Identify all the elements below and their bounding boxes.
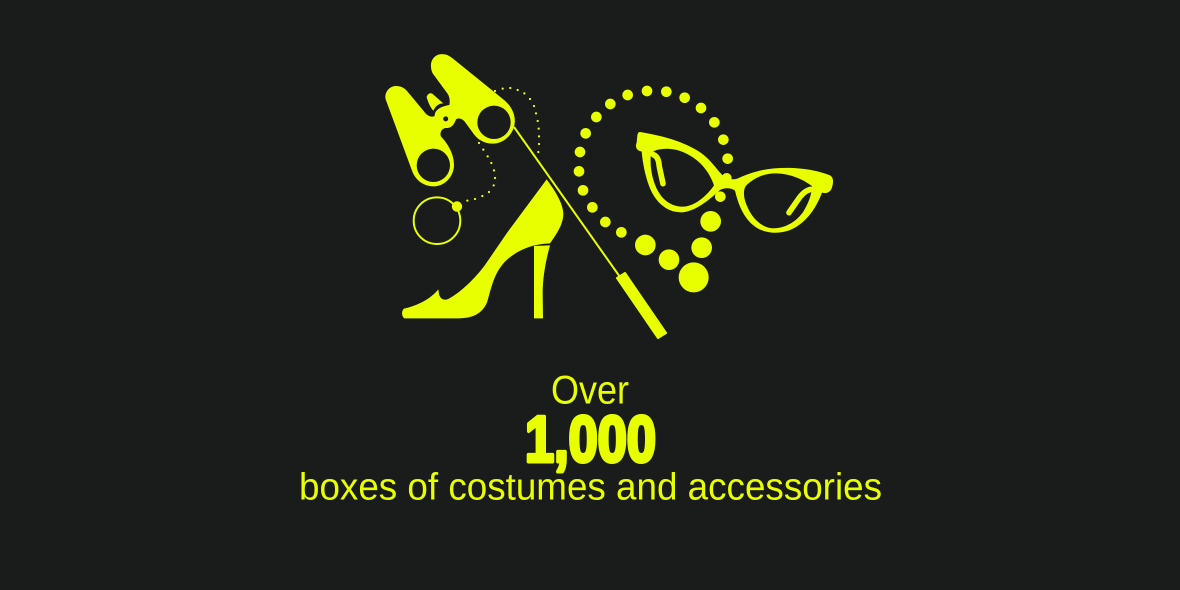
icon: lorgnette opera glasses <box>385 54 515 186</box>
glasses right temple arm <box>789 189 811 213</box>
icon: cat-eye glasses <box>636 132 833 233</box>
icon: lorgnette hinge nub <box>427 93 443 111</box>
icon: dotted lorgnette chain <box>466 87 540 202</box>
text: Over: Over <box>551 368 629 412</box>
icon: lorgnette handle <box>617 273 666 338</box>
shoe heel <box>534 245 550 318</box>
icon: high heel shoe <box>402 179 563 318</box>
glasses left temple arm <box>653 155 663 184</box>
icon: single ring and bead <box>414 197 462 244</box>
icon: lorgnette stick line <box>514 127 620 277</box>
icon: pearl necklace <box>574 86 733 292</box>
text: boxes of costumes and accessories: boxes of costumes and accessories <box>299 466 882 508</box>
text: 1,000: 1,000 <box>525 402 656 476</box>
